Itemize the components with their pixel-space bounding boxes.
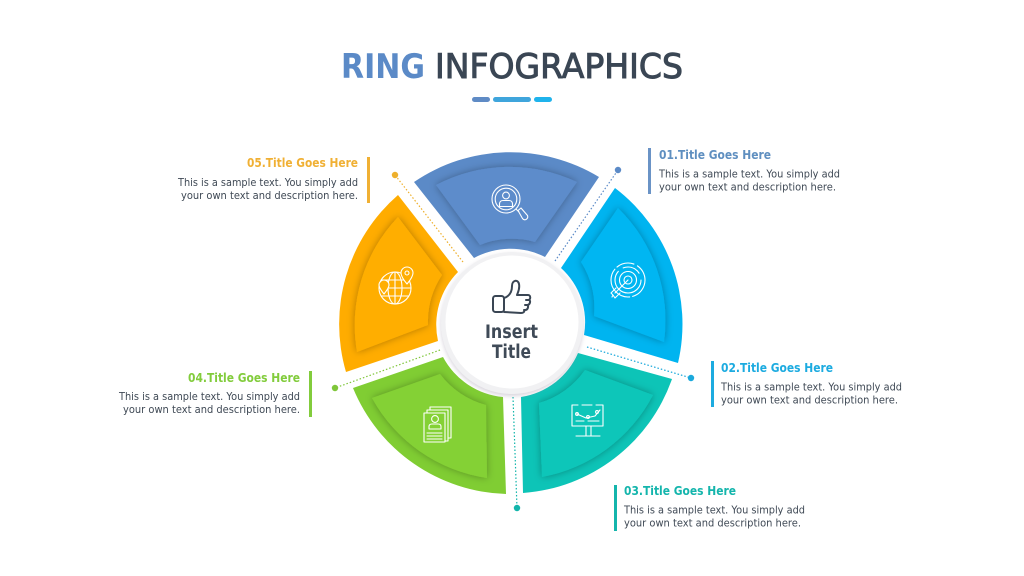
segment 01 blue <box>414 152 599 258</box>
segment 03 teal <box>521 353 672 493</box>
callout 02: 02.Title Goes Here <box>721 361 833 375</box>
icon: magnifier with person <box>492 185 528 220</box>
icon: resume documents <box>424 407 451 442</box>
center circle <box>441 252 583 394</box>
leader line 05 <box>392 172 463 262</box>
callout 04 <box>118 371 312 417</box>
callout 02 <box>711 361 902 407</box>
leader line 02 <box>587 347 694 381</box>
leader line 04 <box>332 350 440 391</box>
callout 04: your own text and description here. <box>123 404 300 416</box>
title: RING <box>341 47 425 87</box>
callout 03: 03.Title Goes Here <box>624 484 736 498</box>
leader line 01 <box>555 167 621 261</box>
callout 05: 05.Title Goes Here <box>247 156 358 170</box>
callout 04: This is a sample text. You simply add <box>118 391 300 403</box>
callout 04: 04.Title Goes Here <box>188 371 300 385</box>
segment 05 orange <box>339 195 458 372</box>
callout 05 <box>177 156 370 203</box>
icon: globe with pin <box>379 267 413 304</box>
ring infographic slide <box>118 52 902 531</box>
icon: target with arrow <box>611 263 645 298</box>
segment 02 cyan <box>561 188 682 363</box>
callout 01: This is a sample text. You simply add <box>658 168 840 180</box>
callout 03 <box>614 484 805 531</box>
segment 04 green <box>353 357 506 494</box>
center label: Insert <box>485 322 538 343</box>
callout 01: 01.Title Goes Here <box>659 148 771 162</box>
center label: Title <box>492 342 531 363</box>
callout 03: your own text and description here. <box>624 518 801 530</box>
callout 02: This is a sample text. You simply add <box>720 382 902 394</box>
callout 05: your own text and description here. <box>181 190 358 202</box>
icon: thumbs up <box>493 281 530 313</box>
callout 05: This is a sample text. You simply add <box>177 177 358 189</box>
callout 01: your own text and description here. <box>659 182 836 194</box>
center label <box>485 322 538 363</box>
title underline dashes <box>472 97 552 102</box>
icon: presentation board chart <box>572 405 603 436</box>
callout 02: your own text and description here. <box>721 394 898 406</box>
leader line 03 <box>513 397 520 511</box>
callout 03: This is a sample text. You simply add <box>623 504 805 516</box>
title: INFOGRAPHICS <box>435 47 683 87</box>
callout 01 <box>648 148 840 194</box>
